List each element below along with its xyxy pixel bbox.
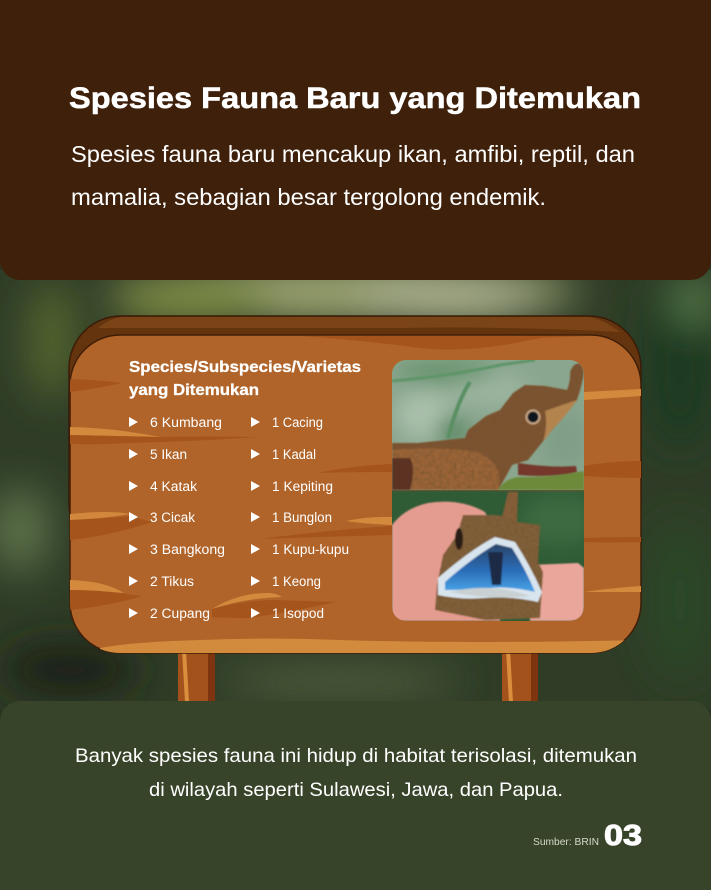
species list, column 1: 5 Ikan — [150, 447, 187, 462]
species list, column 2: 1 Cacing — [272, 415, 323, 430]
intro text — [71, 141, 635, 210]
signboard — [69, 316, 641, 653]
sign front board — [70, 335, 641, 653]
species list, column 2: 1 Kupu-kupu — [272, 542, 349, 557]
body and head — [392, 364, 584, 490]
species list, column 1: 6 Kumbang — [150, 415, 222, 430]
sign heading: Species/Subspecies/Varietas — [129, 359, 361, 376]
source: Sumber: BRIN — [533, 837, 599, 848]
intro text: mamalia, sebagian besar tergolong endemik. — [71, 184, 546, 210]
horn and head — [435, 492, 543, 620]
species list, column 1: 3 Cicak — [150, 510, 195, 525]
closing text: di wilayah seperti Sulawesi, Jawa, dan Papua. — [149, 779, 563, 801]
bottom panel: closing text and source — [0, 701, 711, 890]
front leg to rock — [518, 463, 577, 476]
species list, column 2: 1 Kadal — [272, 447, 316, 462]
mouth — [438, 537, 542, 602]
snout stripe — [543, 400, 577, 442]
title: Spesies Fauna Baru yang Ditemukan — [69, 82, 641, 115]
species list, column 2: 1 Isopod — [272, 606, 324, 621]
closing text: Banyak spesies fauna ini hidup di habitat terisolasi, ditemukan — [75, 745, 637, 767]
closing text — [75, 745, 637, 801]
species list, column 2 — [251, 415, 349, 621]
sign heading — [129, 359, 361, 399]
species list, column 1: 2 Cupang — [150, 606, 210, 621]
blurred forest background — [0, 266, 711, 710]
photo: lizard side view — [392, 360, 589, 490]
fingers — [392, 502, 500, 621]
page number: 03 — [604, 820, 642, 852]
sign back board — [69, 316, 641, 556]
species list, column 1: 3 Bangkong — [150, 542, 225, 557]
sign heading: yang Ditemukan — [129, 382, 259, 399]
rear leg — [392, 458, 413, 490]
photo: lizard with blue mouth — [392, 490, 584, 621]
signboard posts — [178, 650, 538, 702]
species list, column 1: 4 Katak — [150, 479, 197, 494]
intro text: Spesies fauna baru mencakup ikan, amfibi, reptil, dan — [71, 141, 635, 167]
species list, column 2: 1 Keong — [272, 574, 321, 589]
species list, column 2: 1 Bunglon — [272, 510, 332, 525]
eye — [526, 410, 540, 424]
species list, column 2: 1 Kepiting — [272, 479, 333, 494]
species list, column 1: 2 Tikus — [150, 574, 194, 589]
species list, column 1 — [129, 415, 225, 621]
top panel: heading and intro — [0, 0, 711, 280]
wood grain — [70, 336, 641, 653]
moss — [498, 471, 584, 490]
